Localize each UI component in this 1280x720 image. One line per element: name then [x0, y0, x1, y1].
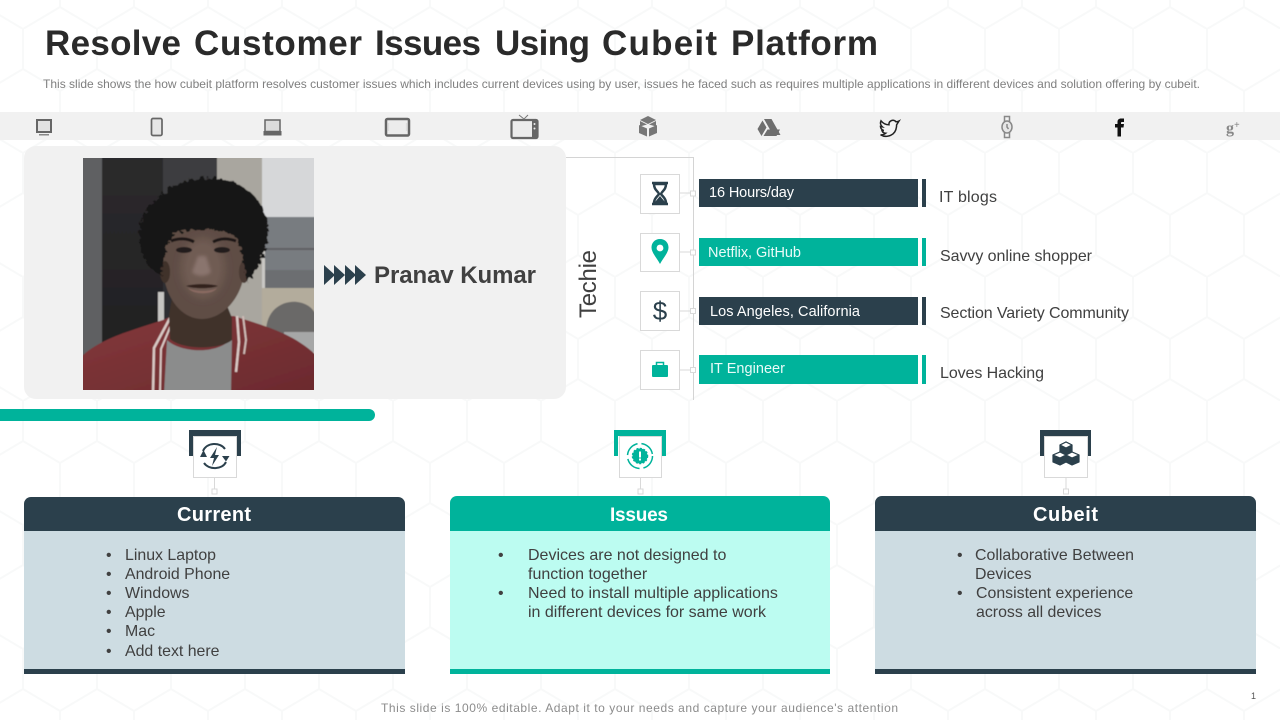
row: job [640, 350, 1044, 390]
body: Cubeit list: • [957, 547, 963, 564]
bar: Los Angeles, California: Los Angeles, California [710, 304, 861, 320]
row: hours [640, 174, 997, 214]
icon: google plus: g [1226, 120, 1234, 137]
neck [169, 298, 232, 347]
row: city [640, 292, 1129, 330]
bar: 16 Hours/day [699, 179, 918, 207]
body: Issues list: in different devices for same work [528, 604, 767, 621]
page number: 1 [1251, 691, 1256, 701]
icon: map pin [640, 234, 680, 272]
body: Current list: • [106, 604, 112, 621]
body: Current list: Linux Laptop [125, 547, 216, 564]
icon: hourglass [640, 174, 680, 214]
bar: IT Engineer [699, 355, 918, 384]
title: Using [495, 24, 590, 63]
row: location [640, 234, 1093, 272]
panel: profile card [24, 146, 566, 399]
panel: current [24, 430, 405, 674]
jacket [80, 316, 317, 393]
subtitle description: This slide shows the how cubeit platform resolves customer issues which includes current devices using by user, issues he faced such as requires multiple applications in different devices and solution offering by cubeit. [43, 77, 1200, 91]
header: Current [24, 497, 405, 531]
eyebrows and eyes [171, 239, 236, 242]
divider bar [0, 409, 375, 421]
icon: google drive [758, 119, 780, 136]
body: Issues list: Devices are not designed to [528, 547, 726, 564]
text: Savvy online shopper: Savvy online shopper [940, 248, 1093, 265]
body: Issues list [450, 531, 830, 674]
title: Customer [194, 24, 362, 63]
photo: portrait of Pranav Kumar [80, 155, 317, 393]
header: Current: Current [177, 504, 251, 526]
body: Cubeit list: Devices [975, 566, 1032, 583]
icon: monitor [37, 120, 51, 136]
text: Section Variety Community: Section Variety Community [940, 305, 1129, 322]
name: Pranav Kumar [374, 262, 536, 289]
panel: issues [450, 430, 830, 674]
body: Cubeit list: Consistent experience [976, 585, 1133, 602]
jacket stripes [153, 318, 170, 393]
body: Issues list: function together [528, 566, 648, 583]
persona label: Techie [575, 250, 602, 318]
icon: dollar: $ [653, 296, 668, 326]
body: Issues list: Need to install multiple applications [528, 585, 778, 602]
body: Current list: • [106, 547, 112, 564]
body: Current list: • [106, 643, 112, 660]
header: Cubeit: Cubeit [1033, 504, 1098, 526]
body: Current list [24, 531, 405, 674]
bar: Los Angeles, California [699, 297, 918, 325]
body: Issues list: • [498, 547, 504, 564]
icon: google plus: + [1234, 120, 1240, 131]
persona bracket line [566, 158, 694, 400]
icon: twitter [880, 120, 899, 136]
icon: television [512, 115, 538, 138]
body: Current list: Android Phone [125, 566, 230, 583]
bar: Netflix, GitHub: Netflix, GitHub [708, 245, 801, 261]
title: Resolve [45, 24, 181, 63]
panel: cubeit [875, 430, 1256, 674]
header: Issues: Issues [610, 505, 668, 526]
icon: facebook [1115, 118, 1124, 136]
body: Issues list: • [498, 585, 504, 602]
face [163, 225, 245, 319]
title: Issues [375, 24, 481, 63]
icon: tablet landscape [386, 119, 409, 136]
icon: smartwatch [1002, 116, 1012, 138]
hair [139, 177, 268, 282]
body: Current list: Mac [125, 623, 155, 640]
body: Current list: Add text here [125, 643, 220, 660]
body: Cubeit list: across all devices [976, 604, 1101, 621]
body: Current list: Windows [125, 585, 190, 602]
icon: gear cycle [614, 430, 666, 494]
body: Current list: • [106, 566, 112, 583]
header: Cubeit [875, 496, 1256, 531]
footer note: This slide is 100% editable. Adapt it to your needs and capture your audience's attention [381, 701, 898, 715]
icon: cubes [1040, 430, 1091, 494]
header: Issues [450, 496, 830, 531]
body: Cubeit list [875, 531, 1256, 674]
mouth [186, 284, 218, 288]
arrows: four chevrons [324, 265, 366, 285]
title [45, 24, 878, 63]
bar: Netflix, GitHub [699, 238, 918, 266]
icon: laptop [264, 120, 282, 136]
title: Cubeit [602, 24, 717, 63]
bar: 16 Hours/day: 16 Hours/day [709, 185, 795, 201]
bar: IT Engineer: IT Engineer [710, 361, 785, 377]
text: Loves Hacking: Loves Hacking [940, 365, 1044, 382]
title: Platform [731, 24, 878, 63]
body: Cubeit list: • [957, 585, 963, 602]
body: Current list: • [106, 623, 112, 640]
icon: dollar [640, 292, 680, 330]
shirt [164, 338, 232, 393]
icon: briefcase [640, 350, 680, 390]
icon strip [0, 112, 1280, 140]
nose [192, 256, 211, 276]
icon: phone [152, 118, 162, 136]
body: Current list: • [106, 585, 112, 602]
body: Current list: Apple [125, 604, 166, 621]
icon: energy cycle [189, 430, 241, 494]
body: Cubeit list: Collaborative Between [975, 547, 1134, 564]
text: IT blogs: IT blogs [939, 189, 997, 206]
icon: dropbox box [639, 116, 657, 136]
